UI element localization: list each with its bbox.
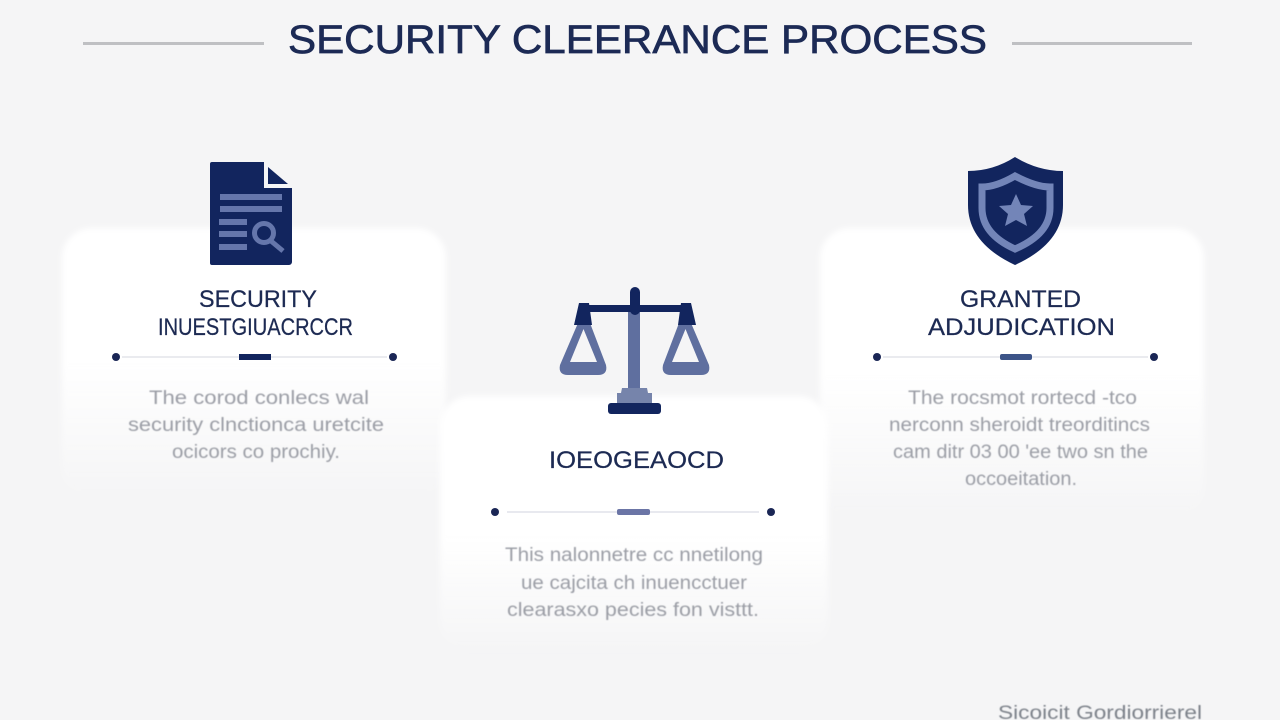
text block: clearasxo pecies fon visttt. [507,600,759,621]
heading: background: IOEOGEAOCD [549,447,724,474]
text block [128,388,384,463]
text block: security clnctionca uretcite [128,415,384,436]
icon: scales of justice [560,287,709,414]
heading: security investigation [158,286,353,341]
text block [505,545,763,621]
text block: ue cajcita ch inuencctuer [521,573,748,594]
divider [112,353,397,361]
title [83,18,1192,62]
text block: ocicors co prochiy. [172,442,340,463]
text block: This nalonnetre cc nnetilong [505,545,763,566]
heading: granted adjudication: ADJUDICATION [928,314,1115,341]
title: SECURITY CLEERANCE PROCESS [288,18,987,62]
text block: The rocsmot rortecd -tco [908,388,1137,409]
panel: background check [440,287,828,651]
panel: granted adjudication [820,157,1204,518]
text block: nerconn sheroidt treorditincs [889,415,1150,436]
icon: document with magnifier [210,162,292,265]
panel: security investigation [62,162,446,498]
heading: security investigation: SECURITY [199,286,317,313]
heading: granted adjudication: GRANTED [960,286,1081,313]
icon: shield with star [968,157,1063,265]
text block: The corod conlecs wal [149,388,369,409]
text block [889,388,1150,490]
divider [491,508,775,516]
divider [873,353,1158,361]
heading: security investigation: INUESTGIUACRCCR [158,314,353,341]
heading: granted adjudication [928,286,1115,341]
text block: occoeitation. [965,469,1077,490]
text block: cam ditr 03 00 'ee two sn the [893,442,1148,463]
